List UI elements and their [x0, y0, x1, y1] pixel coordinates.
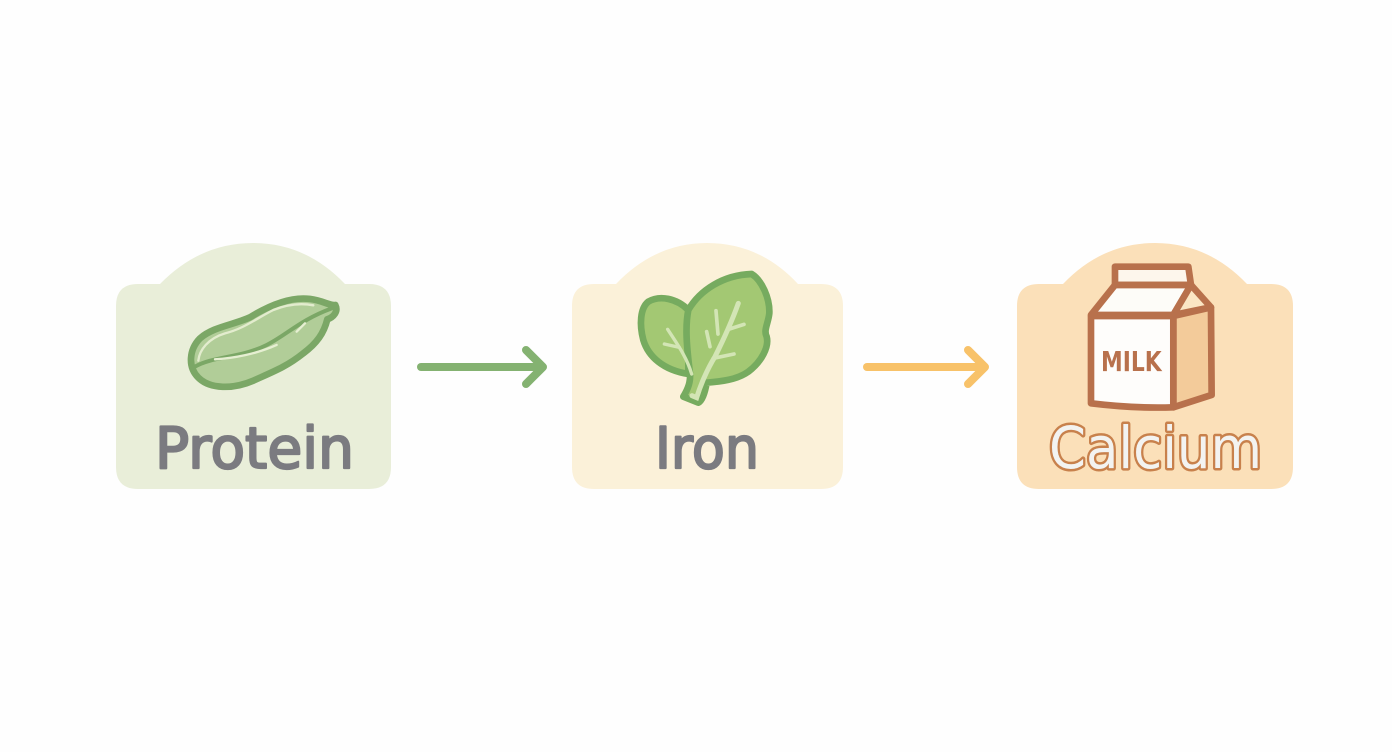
- label: Protein: Protein: [155, 416, 354, 482]
- icon: bean pod: [191, 299, 336, 387]
- arrow: protein to iron: [421, 350, 543, 384]
- label: Iron: Iron: [655, 416, 759, 482]
- panel: iron: [572, 243, 843, 489]
- label: MILK: MILK: [1101, 345, 1163, 378]
- panel: calcium: [1017, 243, 1293, 489]
- icon: spinach leaves: [641, 274, 769, 403]
- icon: milk carton: [1091, 267, 1212, 408]
- arrow: iron to calcium: [867, 350, 985, 384]
- panel: protein: [116, 243, 391, 489]
- label: Calcium: Calcium: [1049, 414, 1262, 482]
